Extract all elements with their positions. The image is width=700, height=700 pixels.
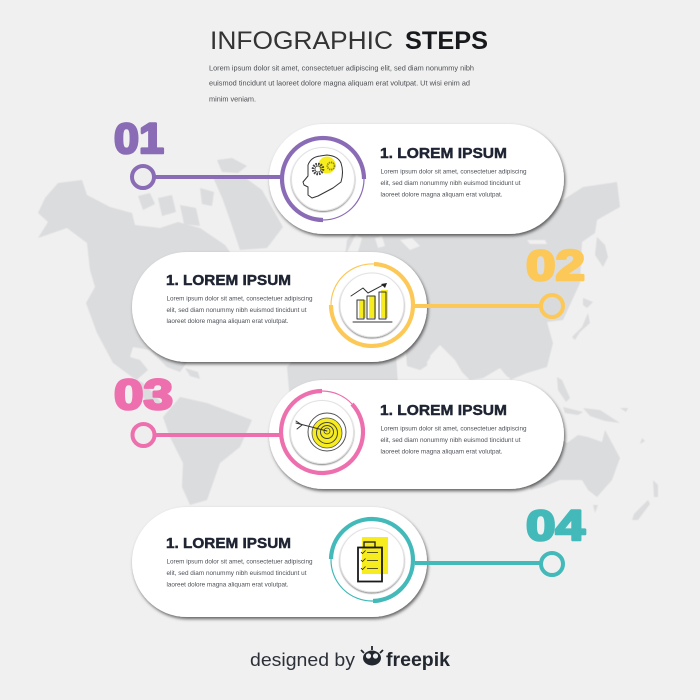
icon disc 2 (340, 273, 404, 337)
icon: freepik logo (361, 646, 383, 666)
body text 4: Lorem ipsum dolor sit amet, consectetuer adipiscing (166, 558, 313, 566)
progress ring 1 (282, 138, 364, 220)
number 04: 04 (526, 502, 585, 550)
icon: bar chart (351, 283, 392, 322)
panel: step 2 (132, 242, 585, 362)
body text 1: laoreet dolore magna aliquam erat volutpat. (380, 192, 503, 198)
title (210, 27, 488, 55)
icon disc 1 (292, 148, 354, 210)
body text 3 (380, 426, 527, 456)
body text 2: elit, sed diam nonummy nibh euismod tincidunt ut (166, 307, 307, 314)
map sea details (347, 234, 547, 380)
card 3 (269, 380, 564, 489)
body text 1: Lorem ipsum dolor sit amet, consectetuer adipiscing (380, 168, 527, 176)
footer credit (250, 646, 450, 671)
progress ring 3 (281, 391, 363, 473)
panel: step 4 (132, 502, 585, 617)
progress ring 2 (331, 264, 413, 346)
icon: head with gears (303, 155, 342, 198)
footer credit: designed by (250, 649, 356, 670)
card 4 (132, 507, 427, 617)
body text 3: laoreet dolore magna aliquam erat volutpat. (380, 448, 503, 456)
icon disc 3 (290, 400, 354, 464)
intro text (209, 66, 474, 104)
world map (38, 158, 658, 520)
body text 2: laoreet dolore magna aliquam erat volutpat. (166, 318, 289, 325)
heading 2: 1. LOREM IPSUM (166, 273, 291, 289)
heading 4: 1. LOREM IPSUM (166, 536, 291, 552)
number 03: 03 (114, 371, 173, 419)
icon: target (296, 413, 346, 451)
body text 1: elit, sed diam nonummy nibh euismod tincidunt ut (380, 180, 521, 187)
card 1 (269, 124, 564, 234)
panel: step 3 (114, 371, 564, 489)
title: STEPS (405, 27, 488, 55)
icon: clipboard (358, 537, 388, 582)
connector 1 (132, 166, 284, 188)
card 2 (132, 252, 427, 362)
body text 4 (166, 558, 313, 588)
intro text: Lorem ipsum dolor sit amet, consectetuer adipiscing elit, sed diam nonummy nibh (209, 66, 474, 72)
connector 2 (415, 295, 563, 317)
intro text: euismod tincidunt ut laoreet dolore magna aliquam erat volutpat. Ut wisi enim ad (209, 80, 470, 88)
progress ring 4 (331, 519, 413, 601)
title: INFOGRAPHIC (210, 27, 393, 55)
panel: step 1 (114, 115, 564, 234)
heading 3: 1. LOREM IPSUM (380, 403, 507, 419)
body text 4: laoreet dolore magna aliquam erat volutpat. (166, 582, 289, 588)
body text 2 (166, 296, 313, 325)
number 01: 01 (114, 115, 164, 163)
body text 3: elit, sed diam nonummy nibh euismod tincidunt ut (380, 437, 521, 444)
intro text: minim veniam. (209, 96, 256, 104)
connector 4 (415, 553, 563, 575)
footer credit: freepik (386, 650, 450, 671)
body text 1 (380, 168, 527, 198)
body text 4: elit, sed diam nonummy nibh euismod tincidunt ut (166, 570, 307, 577)
number 02: 02 (526, 242, 585, 290)
body text 2: Lorem ipsum dolor sit amet, consectetuer adipiscing (166, 296, 313, 302)
body text 3: Lorem ipsum dolor sit amet, consectetuer adipiscing (380, 426, 527, 432)
icon disc 4 (340, 528, 404, 592)
heading 1: 1. LOREM IPSUM (380, 146, 507, 162)
connector 3 (132, 424, 283, 446)
